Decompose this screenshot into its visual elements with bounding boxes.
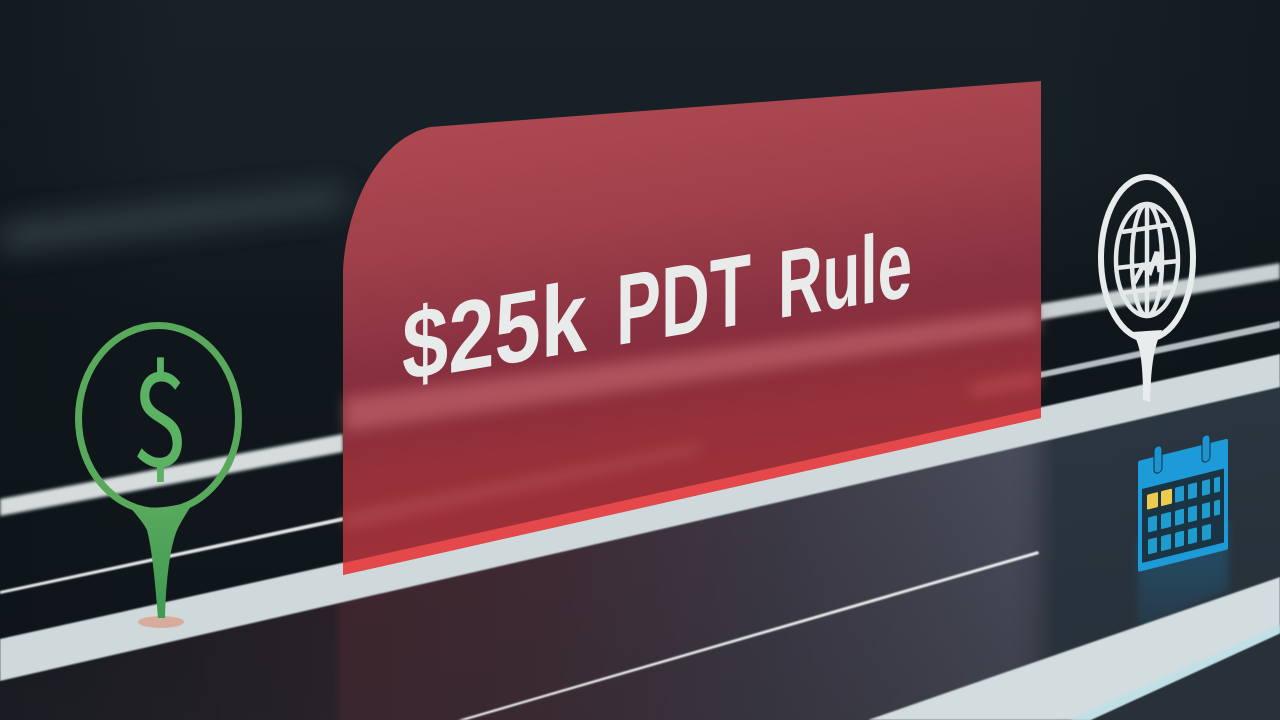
panel light band [345, 308, 1039, 432]
calendar body [1138, 438, 1228, 572]
pin stem [128, 500, 195, 618]
calendar rings [1154, 445, 1162, 474]
thin line right [1040, 321, 1280, 378]
title text [402, 206, 912, 403]
lower right road band [868, 577, 1280, 720]
floor thin line [458, 551, 1039, 720]
band bright edge [1070, 625, 1280, 720]
calendar grid area [1142, 468, 1224, 563]
highlighted days [1147, 488, 1172, 510]
pin stem [1132, 330, 1162, 402]
panel: red barrier [343, 81, 1041, 575]
band body [868, 577, 1280, 720]
panel lower streak [345, 443, 700, 528]
title text: PDT [616, 233, 751, 367]
upper track left [0, 434, 343, 516]
pin base shadow [138, 616, 184, 628]
globe [1116, 204, 1178, 316]
icon: blue calendar [1138, 428, 1228, 572]
main road band [0, 354, 1280, 681]
pin ring [78, 326, 238, 512]
panel right streak [970, 372, 1039, 396]
pin ring [1101, 177, 1193, 339]
panel body [343, 81, 1041, 575]
icon: green dollar pin [78, 315, 238, 628]
wall glow band [0, 188, 345, 250]
floor blue glow under calendar [1138, 520, 1228, 630]
dollar sign: $ [131, 315, 189, 504]
title text: Rule [778, 209, 912, 339]
panel bottom stripe [343, 408, 1041, 575]
thin line left [0, 517, 343, 594]
upper track right [1040, 263, 1280, 320]
title text: $25k [402, 261, 588, 403]
floor surface [0, 380, 1280, 720]
icon: white globe pin [1101, 177, 1193, 402]
calendar days [1148, 476, 1220, 554]
